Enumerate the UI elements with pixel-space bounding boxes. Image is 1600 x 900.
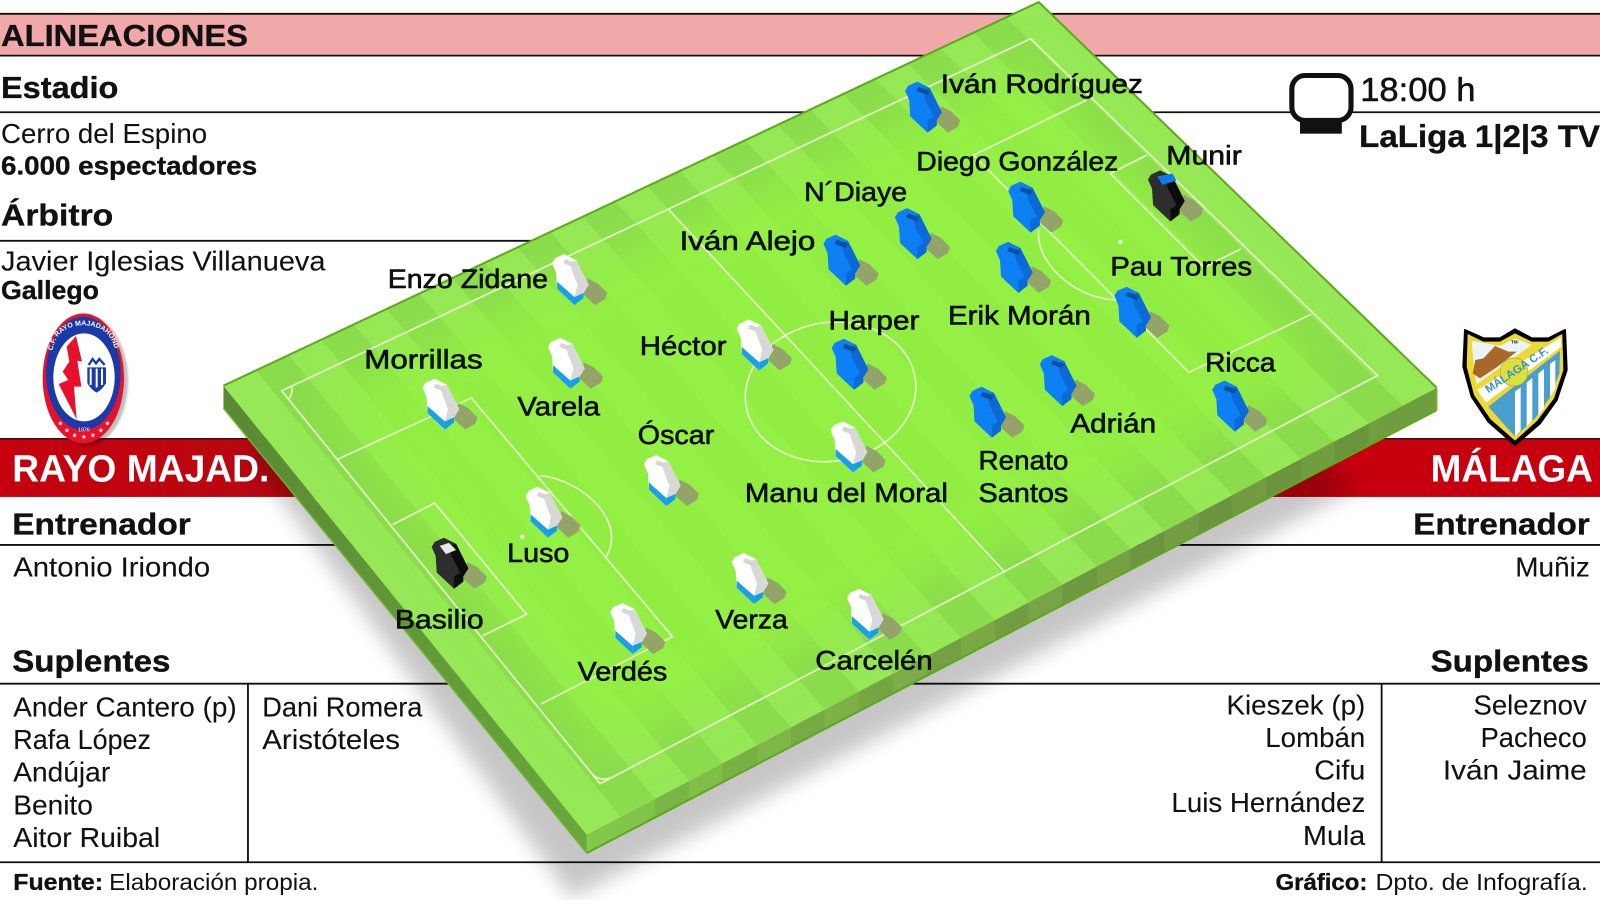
icon: Málaga crest xyxy=(1463,329,1567,445)
team name: Rayo Majad.: RAYO MAJAD. xyxy=(12,448,269,490)
player: Morrillas xyxy=(422,379,478,430)
player name labels: Carcelén xyxy=(815,645,933,675)
icon: Málaga crest: MÁLAGA C.F. xyxy=(1483,344,1551,396)
coach and substitutes: Málaga: Cifu xyxy=(1314,755,1365,786)
coach and substitutes: Málaga: Lombán xyxy=(1265,722,1365,753)
coach and substitutes: Málaga: Muñiz xyxy=(1515,552,1590,583)
icon: Málaga crest: TM xyxy=(1511,339,1518,344)
stadium and referee info block: Cerro del Espino xyxy=(1,118,207,149)
coach and substitutes: Málaga: Seleznov xyxy=(1473,689,1587,720)
player name labels: Renato xyxy=(979,445,1068,475)
player name labels: Héctor xyxy=(640,331,727,361)
player: Pau Torres xyxy=(1114,287,1169,338)
stadium and referee info block: 6.000 espectadores xyxy=(1,152,257,180)
icon: television and match time xyxy=(1292,72,1600,154)
stadium and referee info block: Estadio xyxy=(1,71,118,105)
player name labels: Diego González xyxy=(916,146,1118,176)
header band: Alineaciones xyxy=(0,13,1600,56)
player: Iván Rodríguez xyxy=(905,82,960,133)
coach and substitutes: Rayo Majadahonda: Antonio Iriondo xyxy=(13,552,210,583)
icon: Rayo Majadahonda crest: ★ xyxy=(64,426,70,434)
coach and substitutes: Málaga: Suplentes xyxy=(1431,644,1589,678)
player: Renato Santos xyxy=(969,387,1024,438)
player: Carcelén xyxy=(847,589,902,640)
coach and substitutes: Málaga: Entrenador xyxy=(1413,508,1590,542)
player name labels: Pau Torres xyxy=(1110,252,1252,282)
source footer: Fuente: xyxy=(13,869,103,895)
player name labels xyxy=(364,69,1277,687)
coach and substitutes: Rayo Majadahonda: Aitor Ruibal xyxy=(13,822,160,853)
icon: Rayo Majadahonda crest: 1976 xyxy=(78,427,90,433)
player name labels: Varela xyxy=(517,391,601,421)
lower table rules xyxy=(0,545,1600,862)
team name: Málaga: MÁLAGA xyxy=(1431,448,1593,490)
icon: Rayo Majadahonda crest: ★ xyxy=(98,426,104,434)
player: Verza xyxy=(732,553,787,604)
icon: television and match time: 18:00 h xyxy=(1360,72,1476,109)
player name labels: Harper xyxy=(829,306,919,336)
player: Diego González xyxy=(1008,182,1063,233)
coach and substitutes: Rayo Majadahonda: Suplentes xyxy=(12,644,170,678)
player: Verdés xyxy=(610,603,665,654)
pitch markings xyxy=(282,39,1378,784)
player: Erik Morán xyxy=(996,242,1051,293)
icon: Rayo Majadahonda crest: C.F. RAYO MAJADAHONDA xyxy=(48,320,119,350)
player name labels: Manu del Moral xyxy=(745,478,948,508)
stadium and referee info block: Gallego xyxy=(1,277,99,305)
player name labels: Adrián xyxy=(1070,409,1156,439)
source footer: Dpto. de Infografía. xyxy=(1376,869,1588,895)
coach and substitutes: Rayo Majadahonda: Rafa López xyxy=(13,724,151,755)
icon: Rayo Majadahonda crest: ★ xyxy=(57,420,63,428)
player name labels: Basilio xyxy=(395,605,484,635)
coach and substitutes: Rayo Majadahonda: Aristóteles xyxy=(262,724,400,755)
icon: Rayo Majadahonda crest: ★ xyxy=(90,431,96,439)
player: N´Diaye xyxy=(895,208,950,259)
icon: Rayo Majadahonda crest xyxy=(42,313,129,446)
player: Basilio xyxy=(432,538,487,589)
field shadow xyxy=(245,306,1357,898)
player: Adrián xyxy=(1040,355,1095,406)
player: Harper xyxy=(832,339,887,390)
player name labels: Enzo Zidane xyxy=(388,264,548,294)
stadium and referee info block: Javier Iglesias Villanueva xyxy=(1,245,326,276)
player: Héctor xyxy=(737,319,792,370)
icon: Rayo Majadahonda crest: ★ xyxy=(72,431,78,439)
player: Óscar xyxy=(644,455,699,506)
coach and substitutes: Rayo Majadahonda: Ander Cantero (p) xyxy=(13,691,237,722)
player name labels: Erik Morán xyxy=(948,300,1091,330)
coach and substitutes: Málaga: Luis Hernández xyxy=(1171,787,1365,818)
source footer: Elaboración propia. xyxy=(109,869,318,895)
player name labels: Iván Alejo xyxy=(680,226,815,256)
coach and substitutes: Málaga: Pacheco xyxy=(1481,722,1587,753)
stadium and referee info block: Árbitro xyxy=(1,198,113,233)
coach and substitutes: Rayo Majadahonda: Dani Romera xyxy=(262,691,423,722)
stadium and referee info block xyxy=(0,71,1600,305)
coach and substitutes: Rayo Majadahonda: Benito xyxy=(13,789,93,820)
football pitch xyxy=(223,2,1437,853)
coach and substitutes: Rayo Majadahonda xyxy=(12,508,423,853)
pitch side faces xyxy=(223,386,1437,853)
players: Rayo Majadahonda xyxy=(422,254,902,654)
coach and substitutes: Rayo Majadahonda: Entrenador xyxy=(12,508,191,542)
player name labels: Morrillas xyxy=(364,344,483,374)
player name labels: Verza xyxy=(715,605,789,635)
player name labels: Munir xyxy=(1166,140,1242,170)
player: Enzo Zidane xyxy=(552,254,607,305)
player: Varela xyxy=(548,338,603,389)
icon: television and match time: LaLiga 1|2|3 TV xyxy=(1359,118,1600,154)
players: Málaga xyxy=(823,82,1267,438)
coach and substitutes: Málaga: Kieszek (p) xyxy=(1227,689,1365,720)
player name labels: Santos xyxy=(979,478,1068,508)
source footer xyxy=(13,869,1588,895)
player: Munir xyxy=(1148,170,1203,221)
header band: Alineaciones: ALINEACIONES xyxy=(1,19,248,53)
player: Manu del Moral xyxy=(831,421,886,472)
player: Luso xyxy=(526,487,581,538)
coach and substitutes: Málaga xyxy=(1171,508,1590,851)
source footer: Gráfico: xyxy=(1276,869,1367,895)
player: Iván Alejo xyxy=(823,235,879,286)
coach and substitutes: Málaga: Iván Jaime xyxy=(1443,755,1587,786)
coach and substitutes: Málaga: Mula xyxy=(1303,820,1366,851)
player name labels: Óscar xyxy=(638,419,714,450)
team band: red bars xyxy=(0,439,1600,497)
player name labels: Verdés xyxy=(578,657,667,687)
grass stripes xyxy=(256,17,1403,816)
player name labels: Ricca xyxy=(1205,347,1277,377)
icon: Rayo Majadahonda crest: ★ xyxy=(105,420,111,428)
coach and substitutes: Rayo Majadahonda: Andújar xyxy=(13,757,110,788)
player: Ricca xyxy=(1212,381,1267,432)
player name labels: Luso xyxy=(507,538,569,568)
icon: Rayo Majadahonda crest: ★ xyxy=(81,433,87,441)
player name labels: Iván Rodríguez xyxy=(941,69,1143,99)
central glow on the grass xyxy=(327,63,1327,750)
player name labels: N´Diaye xyxy=(804,177,907,207)
pitch surface xyxy=(223,2,1437,835)
